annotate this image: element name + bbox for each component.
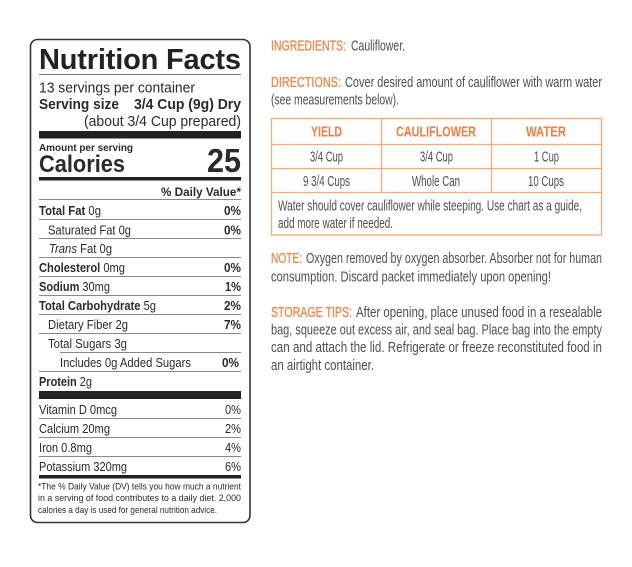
vitamins and minerals: Calcium 20mg (39, 421, 110, 436)
note: consumption. Discard packet immediately upon opening! (271, 270, 551, 286)
nutrient rows: 0% (224, 222, 241, 238)
nutrient rows: Total Carbohydrate 5g (39, 298, 156, 313)
nutrient rows: Saturated Fat 0g (48, 222, 131, 238)
serving information: 3/4 Cup (9g) Dry (134, 96, 242, 113)
table rows: 9 3/4 Cups (303, 174, 350, 190)
vitamins and minerals: 4% (225, 440, 241, 455)
directions: DIRECTIONS: (271, 75, 341, 91)
nutrient rows: Total Sugars 3g (48, 336, 127, 351)
panel: nutrition facts label (30, 40, 250, 522)
calories: 25 (207, 142, 241, 179)
serving information: Serving size (39, 96, 119, 113)
storage tips: STORAGE TIPS: (271, 305, 352, 321)
daily value heading: % Daily Value* (161, 185, 241, 199)
panel: product information (271, 38, 603, 374)
table note (278, 198, 582, 232)
nutrient rows: 0% (222, 355, 239, 370)
footnote: calories a day is used for general nutrition advice. (38, 505, 217, 516)
directions (271, 75, 602, 108)
vitamins and minerals: Potassium 320mg (39, 459, 127, 474)
heading: Nutrition Facts: Nutrition Facts (39, 44, 241, 76)
table rows: Whole Can (412, 174, 460, 190)
calories (39, 142, 241, 179)
measurements table (272, 118, 602, 235)
footnote: in a serving of food contributes to a daily diet. 2,000 (38, 493, 241, 504)
vitamins and minerals (39, 402, 241, 474)
nutrient rows (39, 203, 241, 389)
footnote (38, 482, 241, 516)
nutrient rows: Dietary Fiber 2g (48, 317, 128, 332)
nutrient rows: Trans Fat 0g (49, 241, 112, 256)
vitamins and minerals: 6% (225, 459, 241, 474)
table note: add more water if needed. (278, 216, 393, 232)
table header: WATER (526, 124, 566, 140)
nutrient rows: Protein 2g (39, 374, 92, 389)
nutrient rows: 0% (224, 203, 241, 218)
vitamins and minerals: 0% (225, 402, 241, 417)
vitamins and minerals: Iron 0.8mg (39, 440, 92, 455)
note: NOTE: (271, 251, 302, 267)
nutrient rows: 7% (224, 317, 241, 332)
table header (311, 124, 566, 140)
table rows: 1 Cup (534, 150, 559, 166)
storage tips: an airtight container. (271, 358, 374, 374)
directions: (see measurements below). (271, 92, 399, 108)
ingredients: INGREDIENTS: (271, 38, 346, 54)
storage tips (271, 305, 603, 374)
nutrient rows: Cholesterol 0mg (39, 260, 125, 275)
footnote: *The % Daily Value (DV) tells you how much a nutrient (38, 482, 241, 492)
note (271, 251, 602, 286)
table rows: 10 Cups (528, 174, 564, 190)
calories: Amount per serving (39, 142, 133, 154)
nutrient rows: 0% (224, 260, 241, 275)
calories: Calories (39, 151, 125, 178)
table rows (303, 150, 564, 190)
serving information (39, 80, 242, 130)
nutrient rows: Sodium 30mg (39, 279, 110, 294)
nutrient rows: 2% (224, 298, 241, 313)
nutrient rows: Includes 0g Added Sugars (60, 355, 191, 370)
serving information: (about 3/4 Cup prepared) (84, 113, 241, 130)
serving information: 13 servings per container (39, 80, 195, 96)
nutrient rows: 1% (225, 279, 241, 294)
nutrient rows: Total Fat 0g (39, 203, 101, 218)
table header: YIELD (311, 124, 342, 140)
table rows: 3/4 Cup (310, 150, 343, 166)
ingredients: Cauliflower. (351, 38, 405, 54)
vitamins and minerals: 2% (225, 421, 241, 436)
vitamins and minerals: Vitamin D 0mcg (39, 402, 117, 417)
table rows: 3/4 Cup (420, 150, 453, 166)
table header: CAULIFLOWER (396, 124, 476, 140)
